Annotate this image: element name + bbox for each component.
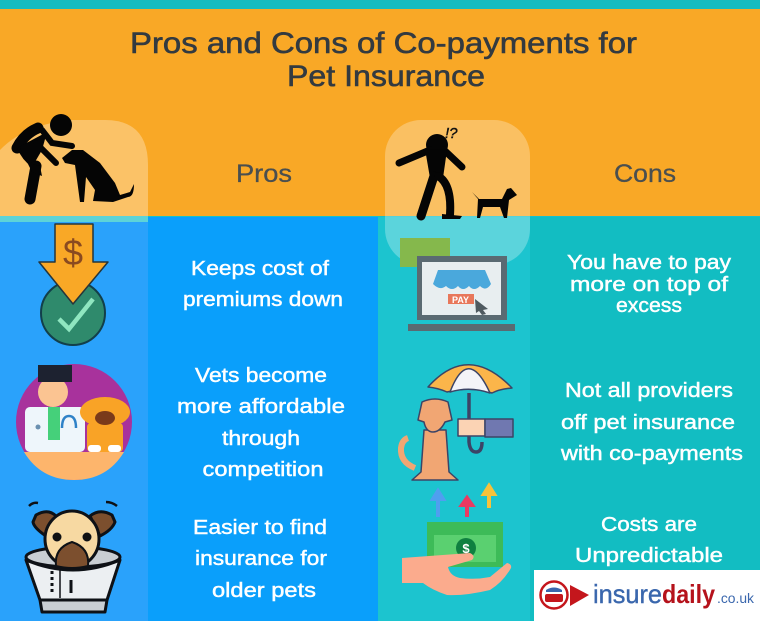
text: providers bbox=[560, 380, 743, 465]
panel: cons icon highlight bbox=[385, 120, 530, 265]
icon: vet and dog bbox=[16, 364, 132, 480]
title: Pet Insurance bbox=[287, 60, 485, 93]
icon: laptop pay: PAY bbox=[452, 295, 469, 305]
text: providers: off pet insurance bbox=[561, 412, 735, 434]
icon: hand with cash: $ bbox=[462, 541, 470, 556]
icon: person petting dog bbox=[17, 114, 134, 202]
icon: dollar arrow with check bbox=[39, 224, 108, 345]
heading: Pros: Pros bbox=[236, 160, 292, 188]
icon: confused person with dog: !? bbox=[445, 125, 458, 142]
text: older pets: Easier to find bbox=[193, 517, 327, 539]
text: older pets: older pets bbox=[212, 580, 316, 602]
text: providers: with co-payments bbox=[560, 443, 743, 465]
panel: pros icon highlight bbox=[0, 120, 148, 222]
text: pay more: You have to pay bbox=[567, 252, 731, 274]
logo: insuredaily.co.uk bbox=[534, 570, 760, 621]
text: keeps cost: Keeps cost of bbox=[191, 258, 329, 280]
text: keeps cost: premiums down bbox=[183, 289, 343, 311]
text: costs bbox=[575, 514, 723, 567]
logo: insuredaily.co.uk: insure bbox=[593, 579, 662, 609]
icon: laptop pay bbox=[400, 238, 515, 331]
text: vets: competition bbox=[202, 459, 324, 481]
text: costs: Unpredictable bbox=[575, 545, 723, 567]
title bbox=[130, 27, 637, 93]
text: pay more: excess bbox=[616, 295, 682, 317]
title: Pros and Cons of Co-payments for bbox=[130, 27, 637, 60]
text: vets bbox=[177, 365, 345, 481]
logo: insuredaily.co.uk: .co.uk bbox=[717, 590, 755, 606]
icon: confused person with dog bbox=[399, 125, 517, 219]
icon: pug in cone bbox=[26, 502, 120, 612]
text: pay more bbox=[567, 252, 731, 317]
text: older pets: insurance for bbox=[195, 548, 327, 570]
text: costs: Costs are bbox=[601, 514, 697, 536]
icon: hand with cash bbox=[402, 486, 511, 595]
text: pay more: more on top of bbox=[570, 274, 729, 296]
icon: dollar arrow with check: $ bbox=[63, 232, 83, 273]
logo: insuredaily.co.uk: daily bbox=[662, 579, 715, 609]
text: providers: Not all providers bbox=[565, 380, 733, 402]
text: vets: through bbox=[222, 428, 300, 450]
icon: dog under umbrella bbox=[401, 365, 513, 480]
text: keeps cost bbox=[183, 258, 343, 311]
heading: Cons: Cons bbox=[614, 160, 676, 188]
text: vets: Vets become bbox=[195, 365, 327, 387]
text: older pets bbox=[193, 517, 327, 602]
text: vets: more affordable bbox=[177, 396, 345, 418]
